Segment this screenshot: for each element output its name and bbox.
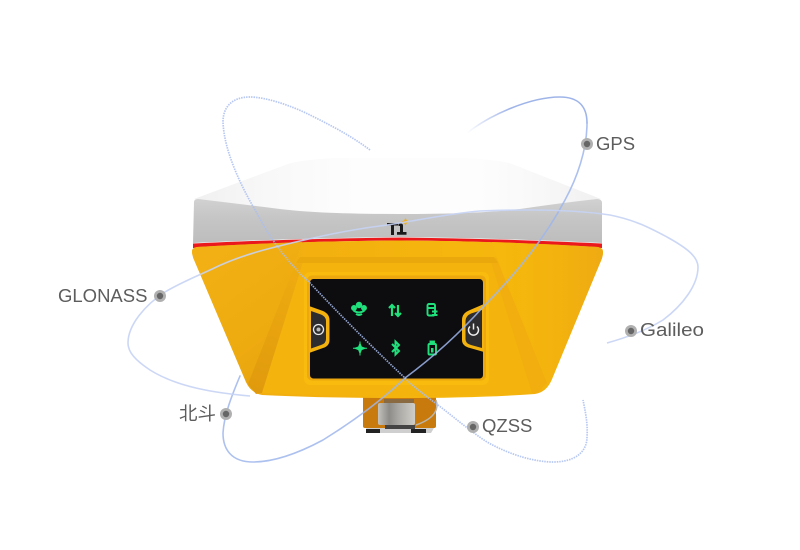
icon: satellite signal	[352, 303, 366, 315]
icon: data arrows	[389, 305, 401, 316]
right side face	[492, 242, 603, 390]
left ridge	[248, 257, 303, 394]
front face	[262, 262, 532, 396]
bright frame around the display	[304, 272, 489, 385]
left yellow notch and button	[309, 306, 330, 353]
orbit: GLONASS and Galileo ring	[128, 210, 698, 396]
left side face	[192, 242, 302, 390]
T1 logo	[387, 218, 410, 235]
receiver body	[192, 158, 603, 433]
right yellow notch and power button	[462, 304, 484, 352]
display shadow	[307, 276, 486, 380]
label: Galileo: Galileo	[640, 319, 704, 340]
label: QZSS: QZSS	[482, 415, 532, 436]
icon: bluetooth	[392, 342, 399, 354]
icon: GNSS star	[353, 342, 367, 356]
right ridge	[491, 257, 547, 393]
orbit: GPS ring	[223, 97, 587, 462]
icon: storage	[428, 304, 438, 316]
label: BeiDou	[179, 403, 232, 424]
label: GPS: GPS	[596, 133, 635, 154]
red stripe	[193, 238, 602, 248]
label: BeiDou: 北斗	[179, 403, 216, 424]
yellow housing	[192, 240, 603, 398]
grey band	[193, 199, 602, 243]
icon: battery	[428, 342, 436, 354]
connector under the receiver	[363, 396, 437, 433]
status icons	[352, 303, 438, 356]
white antenna dome	[194, 158, 601, 214]
orbit: QZSS dotted ring	[223, 97, 587, 462]
display panel	[309, 279, 484, 378]
top bevel above the display	[296, 257, 498, 263]
label: GLONASS: GLONASS	[58, 285, 147, 306]
